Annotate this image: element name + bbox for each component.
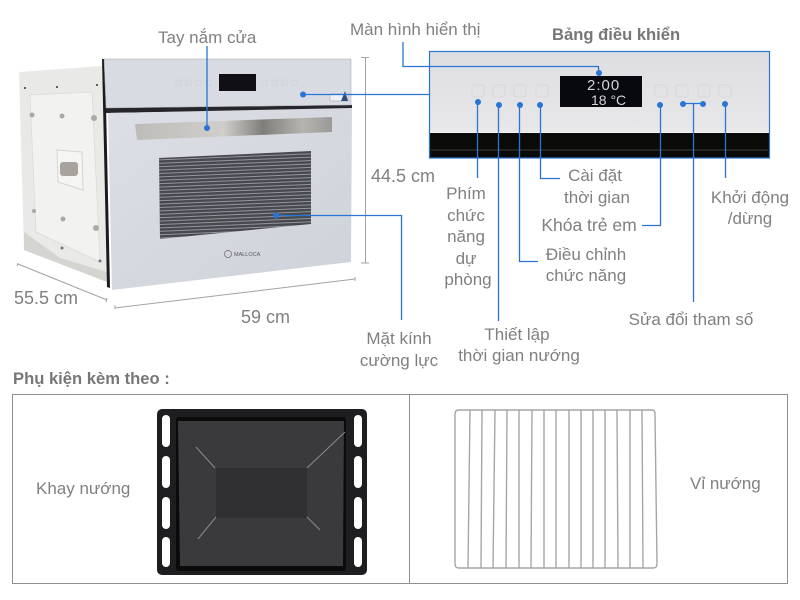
callout: function adjust: chức năng [546,266,626,285]
callout: standby key: chức [447,206,485,225]
digital display: 2:00 [587,77,620,94]
control panel closeup [430,52,770,158]
wire rack [455,410,657,568]
oven body edge [102,59,110,288]
callout: display [350,20,602,76]
callout: time setting [537,102,630,207]
control panel of oven [104,59,351,108]
dimension: depth: 55.5 cm [14,288,78,308]
oven side casing [19,66,107,282]
dimension: width: 59 cm [241,307,290,327]
callout: panel link [300,92,430,98]
callout: standby key: phòng [444,270,492,289]
oven display [219,74,256,91]
digital display: 18 °C [591,92,626,108]
callout: tempered glass [273,212,439,370]
oven door [108,108,352,290]
callout: standby key: dự [456,249,476,268]
callout: edit parameters [629,101,754,329]
callout: baking time: Thiết lập [484,325,550,344]
door window [159,151,311,239]
callout: function adjust [517,102,626,285]
callout: display: Màn hình hiển thị [350,20,480,39]
callout: standby key: năng [447,227,485,246]
baking tray [157,409,367,575]
black strip [430,133,769,158]
dimension lines [17,58,369,309]
digital display [560,76,642,108]
dimension: height: 44.5 cm [371,166,435,186]
callout: baking time [458,102,580,365]
callout: door handle [158,28,257,131]
callout: tempered glass: cường lực [360,351,439,370]
callout: baking time: thời gian nướng [458,346,580,365]
heading: control panel: Bảng điều khiển [552,25,680,44]
callout: start stop [711,101,789,228]
energy label [330,94,348,101]
oven illustration [19,59,352,290]
callout: child lock: Khóa trẻ em [541,215,637,235]
callout: start stop: Khởi động [711,188,789,207]
touch keys [472,85,731,97]
callout: child lock [541,102,663,235]
heading: accessories: Phụ kiện kèm theo : [13,369,170,388]
callout: function adjust: Điều chỉnh [546,245,626,264]
callout: standby key: Phím [446,184,486,203]
callout: time setting: thời gian [564,188,630,207]
brand logo: MALLOCA [234,252,261,258]
callout: standby key [444,99,492,289]
accessories table [12,394,788,584]
callout: start stop: /dừng [728,209,772,228]
callout: time setting: Cài đặt [568,166,622,185]
brand logo [224,250,261,258]
door handle [135,117,332,140]
callout: edit parameters: Sửa đổi tham số [629,310,754,329]
label: rack: Vỉ nướng [690,474,761,493]
label: tray: Khay nướng [36,479,130,498]
callout: tempered glass: Mặt kính [366,329,432,348]
oven keys [176,80,297,85]
callout: door handle: Tay nắm cửa [158,28,257,47]
